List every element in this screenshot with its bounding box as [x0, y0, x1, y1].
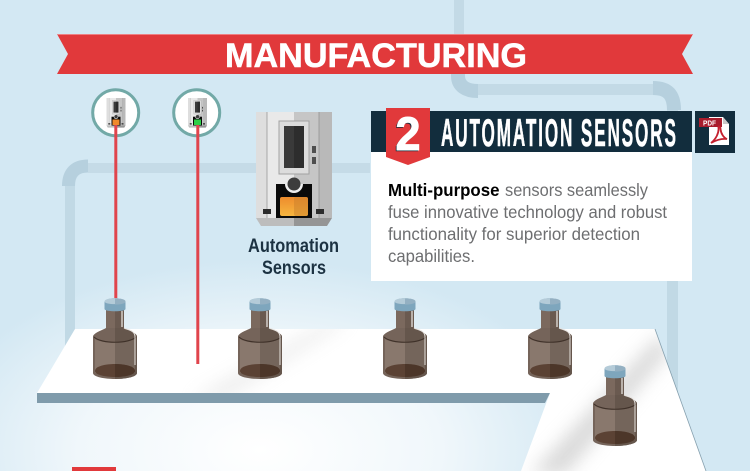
panel header: [371, 111, 692, 152]
icon: automation sensor: [256, 112, 332, 226]
panel heading: AUTOMATION SENSORS: [441, 112, 676, 155]
bottle 2: [238, 298, 282, 379]
number ribbon: [386, 107, 430, 165]
background glow: [0, 260, 750, 471]
icon: small sensor green: [174, 90, 220, 136]
banner title: MANUFACTURING: [225, 37, 527, 75]
sensor label: Sensors: [262, 258, 326, 279]
sensor line 1: [114, 125, 117, 300]
next section ribbon: [72, 467, 116, 471]
sensor label: Automation: [248, 236, 339, 257]
icon: pdf: [695, 111, 735, 153]
table: [37, 320, 706, 471]
bottle 5: [593, 365, 637, 446]
panel: automation sensors: [371, 107, 692, 281]
panel body text: fuse innovative technology and robust: [388, 202, 667, 222]
panel body text: functionality for superior detection: [388, 224, 640, 244]
pipes: [68, 0, 674, 400]
panel body text: Multi-purpose: [388, 180, 500, 200]
icon: pdf: PDF: [703, 120, 717, 128]
panel body text: capabilities.: [388, 246, 475, 266]
number ribbon: 2: [394, 108, 420, 161]
sensor line 2: [196, 125, 199, 364]
number ribbon: 2: [396, 107, 420, 160]
bottle 3: [383, 298, 427, 379]
bottle 4: [528, 298, 572, 379]
panel body text: sensors seamlessly: [505, 180, 648, 200]
bottle 1: [93, 298, 137, 379]
icon: small sensor orange: [93, 90, 139, 136]
banner: manufacturing: [57, 34, 693, 75]
